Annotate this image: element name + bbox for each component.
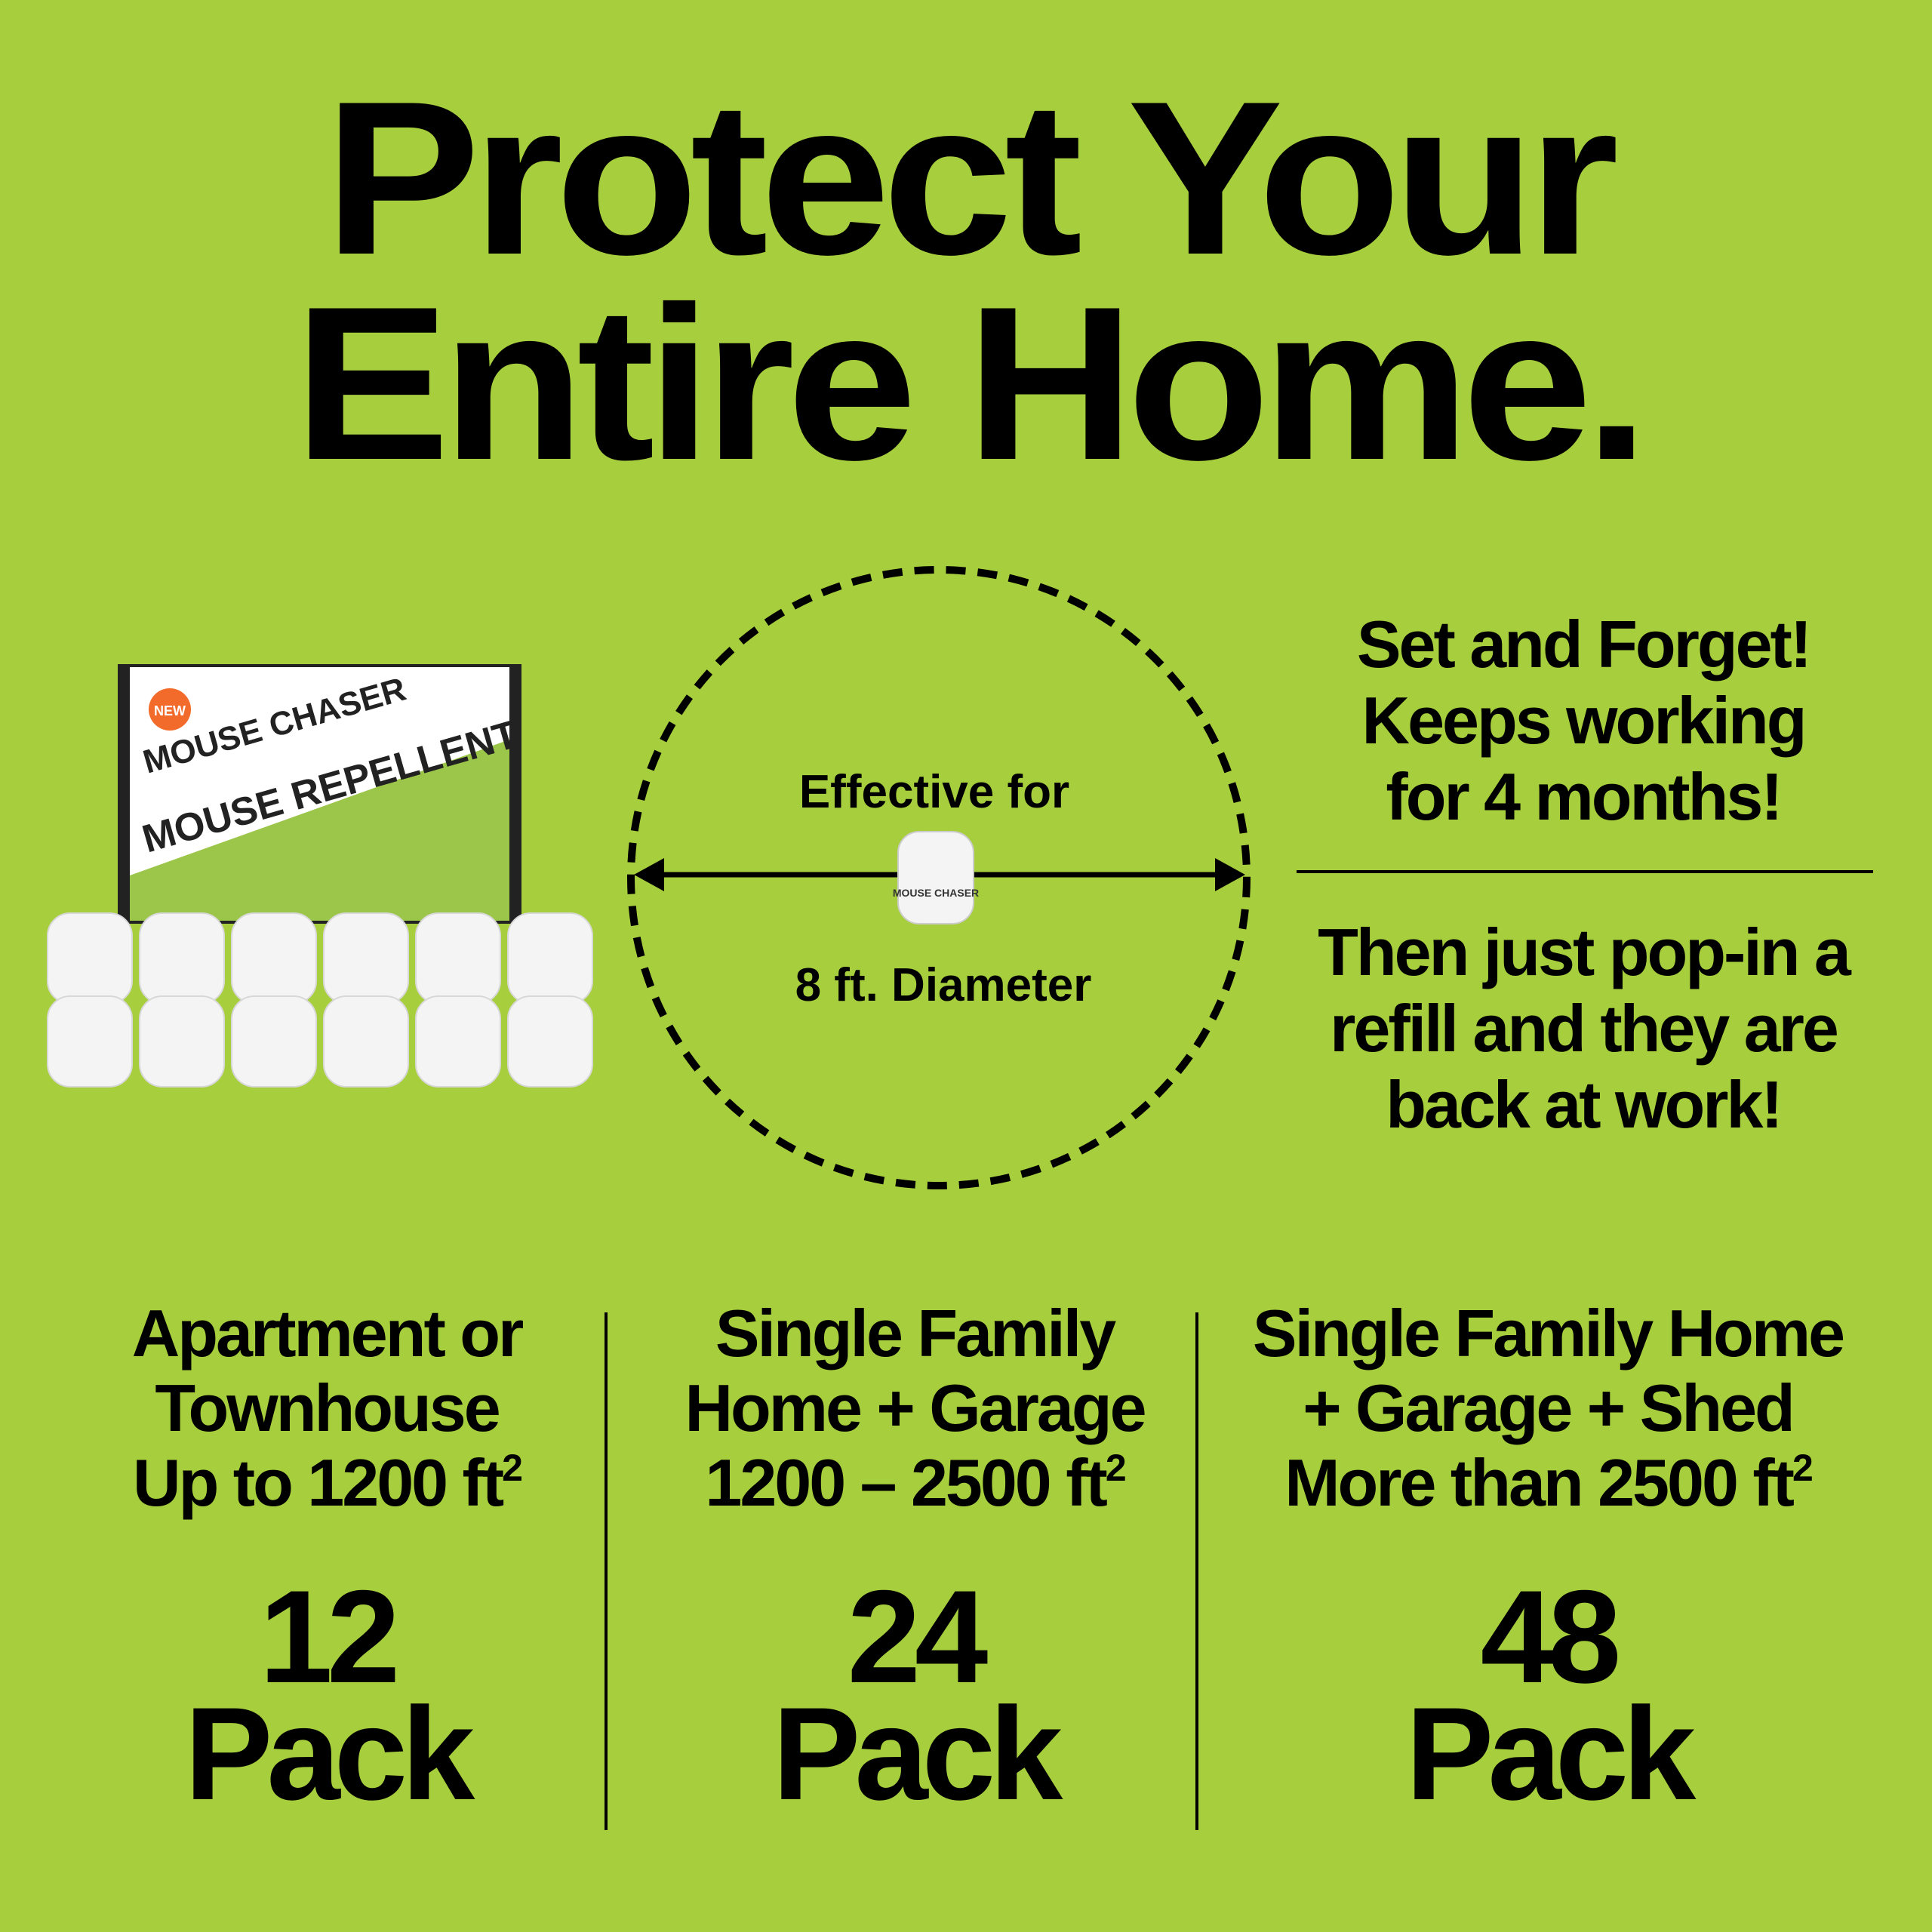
arrow: diameter <box>634 858 1245 891</box>
icon: product box: MOUSE REPELLENT <box>137 712 523 862</box>
product: box and units <box>47 664 593 1088</box>
column: 48 pack: More than 2500 ft2 <box>1284 1445 1811 1520</box>
column: 12 pack: Apartment or <box>132 1296 521 1371</box>
title: Protect Your <box>324 56 1611 300</box>
column: 48 pack <box>1253 1296 1843 1828</box>
number: 48 pack <box>1406 1564 1697 1828</box>
column: 12 pack: Up to 1200 ft2 <box>133 1445 521 1520</box>
icon: product box: MOUSE CHASER <box>139 670 410 781</box>
text: set and forget: Keeps working <box>1362 683 1804 758</box>
number: 24 pack: Pack <box>773 1681 1057 1828</box>
column: 24 pack: Single Family <box>715 1296 1114 1371</box>
text: refill <box>1318 915 1852 1142</box>
title: Entire Home. <box>294 261 1641 506</box>
column: 12 pack: Townhouse <box>155 1371 499 1445</box>
number: 24 pack <box>773 1564 1063 1828</box>
text: set and forget: Set and Forget! <box>1357 607 1810 681</box>
icon: repellent units <box>48 913 592 1087</box>
icon: product box: NEW <box>154 703 186 718</box>
column: 12 pack <box>132 1296 523 1828</box>
text: set and forget: for 4 months! <box>1386 759 1781 834</box>
text: diameter: 8 ft. Diameter <box>795 959 1091 1011</box>
column: 24 pack: Home + Garage <box>685 1371 1145 1445</box>
number: 48 pack: 48 <box>1481 1564 1615 1711</box>
number: 12 pack <box>185 1564 475 1828</box>
number: 48 pack: Pack <box>1406 1681 1690 1828</box>
number: 12 pack: 12 <box>260 1564 394 1711</box>
number: 12 pack: Pack <box>185 1681 469 1828</box>
icon: unit: MOUSE CHASER <box>893 887 979 899</box>
text: set and forget <box>1357 607 1810 834</box>
text: refill: refill and they are <box>1330 991 1837 1066</box>
diagram: effective circle <box>627 566 1251 1189</box>
number: 24 pack: 24 <box>848 1564 982 1711</box>
text: effective for: Effective for <box>799 766 1069 818</box>
column: 24 pack <box>685 1296 1145 1828</box>
icon: product box <box>119 666 523 922</box>
column: 48 pack: + Garage + Shed <box>1303 1371 1793 1445</box>
icon: unit <box>893 832 979 924</box>
text: refill: Then just pop-in a <box>1318 915 1849 989</box>
divider line <box>1297 870 1873 873</box>
column: 48 pack: Single Family Home <box>1253 1296 1843 1371</box>
text: refill: back at work! <box>1386 1067 1781 1142</box>
column: 24 pack: 1200 – 2500 ft2 <box>705 1445 1124 1520</box>
title <box>294 56 1641 506</box>
